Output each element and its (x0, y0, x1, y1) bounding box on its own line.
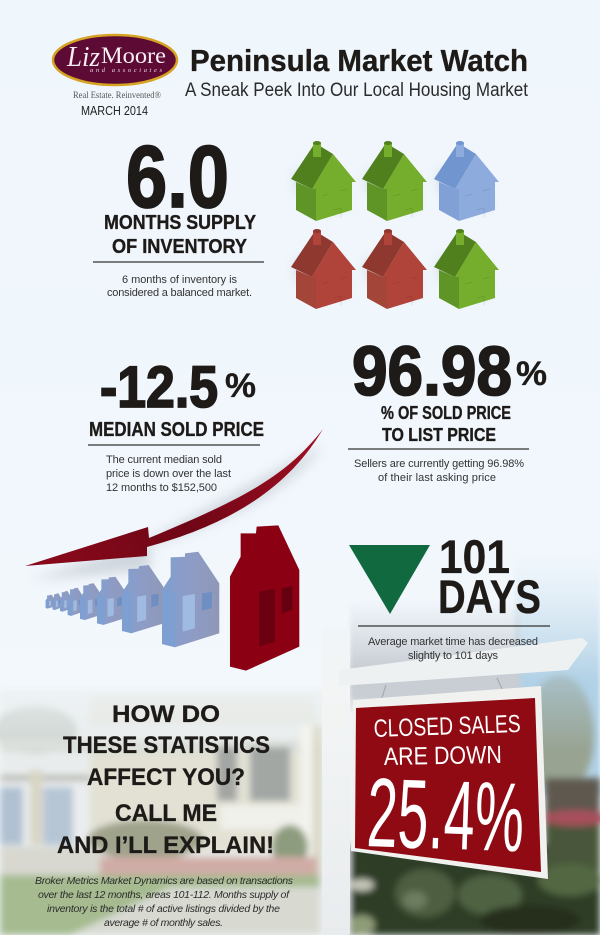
unit: DAYS (438, 570, 541, 623)
for sale style sign (322, 628, 588, 935)
percent sign: % (225, 367, 256, 405)
call to action (57, 701, 274, 859)
call to action: CALL ME (115, 800, 217, 827)
sign post (322, 628, 350, 935)
percent sign: % (516, 355, 547, 393)
icon: blue house (68, 588, 83, 616)
description: Sellers are currently getting 96.98% (354, 458, 524, 470)
icon: blue house (434, 141, 499, 221)
description (107, 274, 252, 299)
footnote: inventory is the total # of active listings divided by the (47, 903, 280, 915)
stat heading (104, 212, 257, 258)
description: of their last asking price (378, 472, 496, 484)
description (368, 636, 538, 662)
description: 12 months to $152,500 (106, 482, 217, 494)
logo: Liz (66, 42, 100, 73)
right side trees, wall and hedge (538, 674, 598, 788)
header (53, 35, 529, 118)
subtitle: A Sneak Peek Into Our Local Housing Market (185, 80, 529, 101)
icon: green house (291, 141, 356, 221)
background sky and house wall fading in behind the sign (350, 555, 600, 795)
description: 6 months of inventory is (122, 274, 238, 286)
description (354, 458, 524, 484)
date: MARCH 2014 (81, 103, 148, 118)
sign text (365, 710, 526, 872)
sign text: ARE DOWN (384, 741, 502, 771)
big number: 96.98 (352, 332, 512, 410)
sign text: CLOSED SALES (373, 710, 521, 743)
stat heading: MONTHS SUPPLY (104, 212, 257, 234)
description: Average market time has decreased (368, 636, 538, 648)
big number: -12.5 (100, 355, 218, 420)
title: Peninsula Market Watch (190, 43, 528, 78)
call to action: AFFECT YOU? (87, 764, 245, 791)
stat heading: TO LIST PRICE (382, 425, 496, 445)
logo (53, 35, 177, 85)
icon: blue house (53, 593, 62, 610)
stat heading: OF INVENTORY (112, 236, 248, 258)
icon: green down triangle (349, 545, 430, 614)
arrow: falling price (25, 429, 323, 580)
blue houses row (46, 552, 219, 647)
stat: median sold price (88, 355, 264, 494)
icon: blue house (122, 565, 164, 633)
icon: red house (291, 229, 356, 309)
hooks (380, 678, 505, 704)
icon: red house falling (230, 525, 299, 671)
sign arm (339, 638, 588, 686)
red panel (355, 698, 541, 872)
call to action: AND I’LL EXPLAIN! (57, 832, 274, 859)
footnote (35, 875, 294, 929)
faint tree (0, 706, 78, 743)
description: The current median sold (106, 454, 222, 466)
houses grid (291, 141, 499, 309)
footnote: Broker Metrics Market Dynamics are based on transactions (35, 875, 294, 887)
icon: blue house (80, 583, 102, 620)
call to action: THESE STATISTICS (63, 732, 270, 759)
icon: blue house (97, 577, 126, 625)
stat: months supply of inventory (93, 127, 264, 299)
shadow (296, 170, 488, 298)
description: considered a balanced market. (107, 287, 252, 299)
background photo: house and garden (0, 660, 600, 935)
stat heading (381, 403, 511, 445)
logo: Moore (101, 43, 166, 68)
footnote: average # of monthly sales. (104, 917, 223, 929)
stat heading: MEDIAN SOLD PRICE (89, 419, 264, 441)
description (106, 454, 231, 494)
icon: blue house (46, 595, 55, 608)
icon: green house (362, 141, 427, 221)
icon: red house (362, 229, 427, 309)
stat: days on market (349, 530, 550, 662)
description: slightly to 101 days (408, 650, 498, 662)
footnote: over the last 12 months, areas 101-112. Months supply of (38, 889, 290, 901)
icon: blue house (60, 591, 72, 612)
big number: 6.0 (126, 127, 229, 226)
call to action: HOW DO (112, 701, 220, 728)
icon: green house (434, 229, 499, 309)
tagline: Real Estate. Reinvented® (73, 90, 161, 101)
big number: 101 (439, 530, 510, 583)
sign board (351, 686, 548, 879)
logo: and associates (90, 67, 162, 74)
icon: blue house (162, 552, 219, 647)
stat heading: % OF SOLD PRICE (381, 403, 511, 423)
description: price is down over the last (106, 468, 231, 480)
stat: sold price to list price (348, 332, 547, 484)
